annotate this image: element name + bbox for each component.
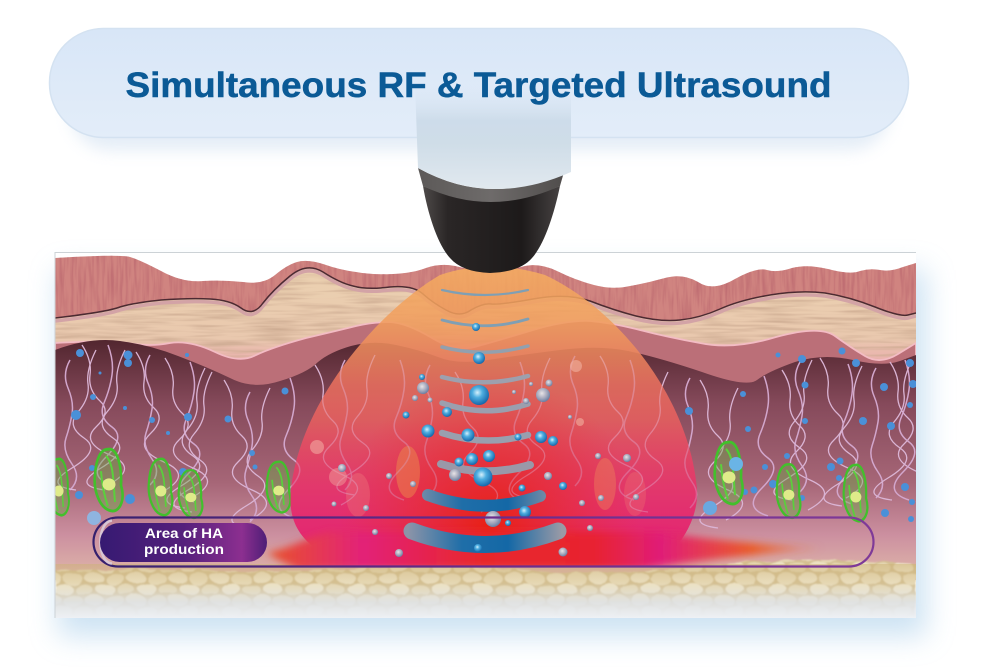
area of HA production label (100, 523, 267, 562)
RF energy dome (290, 268, 698, 544)
area of HA production label: production (144, 541, 224, 557)
beige stratum layer (56, 267, 916, 360)
deep dermis (55, 340, 916, 580)
panel glow shadow (58, 270, 926, 636)
area of HA production label: Area of HA (145, 525, 223, 541)
heat zone band (267, 532, 825, 570)
skin cross-section panel (48, 252, 933, 618)
collagen fibres (58, 345, 933, 528)
title pill shadow (70, 60, 890, 150)
hyaluronic acid bubbles in dome (310, 323, 639, 557)
area of HA production bar outline (94, 518, 874, 566)
title: Simultaneous RF & Targeted Ultrasound (126, 66, 832, 105)
ultrasound wave arcs (412, 290, 558, 544)
probe white body (415, 84, 571, 189)
hyaluronic acid dots left and right (71, 348, 917, 525)
subcutaneous fat layer (56, 558, 916, 610)
ultrasound probe (415, 84, 571, 273)
panel top edge (55, 252, 916, 618)
bottom fade (55, 583, 916, 618)
epidermis outer layer (56, 256, 916, 320)
papillary dermis (56, 322, 916, 385)
fibroblast cells (48, 442, 867, 521)
probe grey collar (418, 168, 564, 202)
probe black tip (423, 186, 560, 273)
title pill (50, 28, 908, 138)
